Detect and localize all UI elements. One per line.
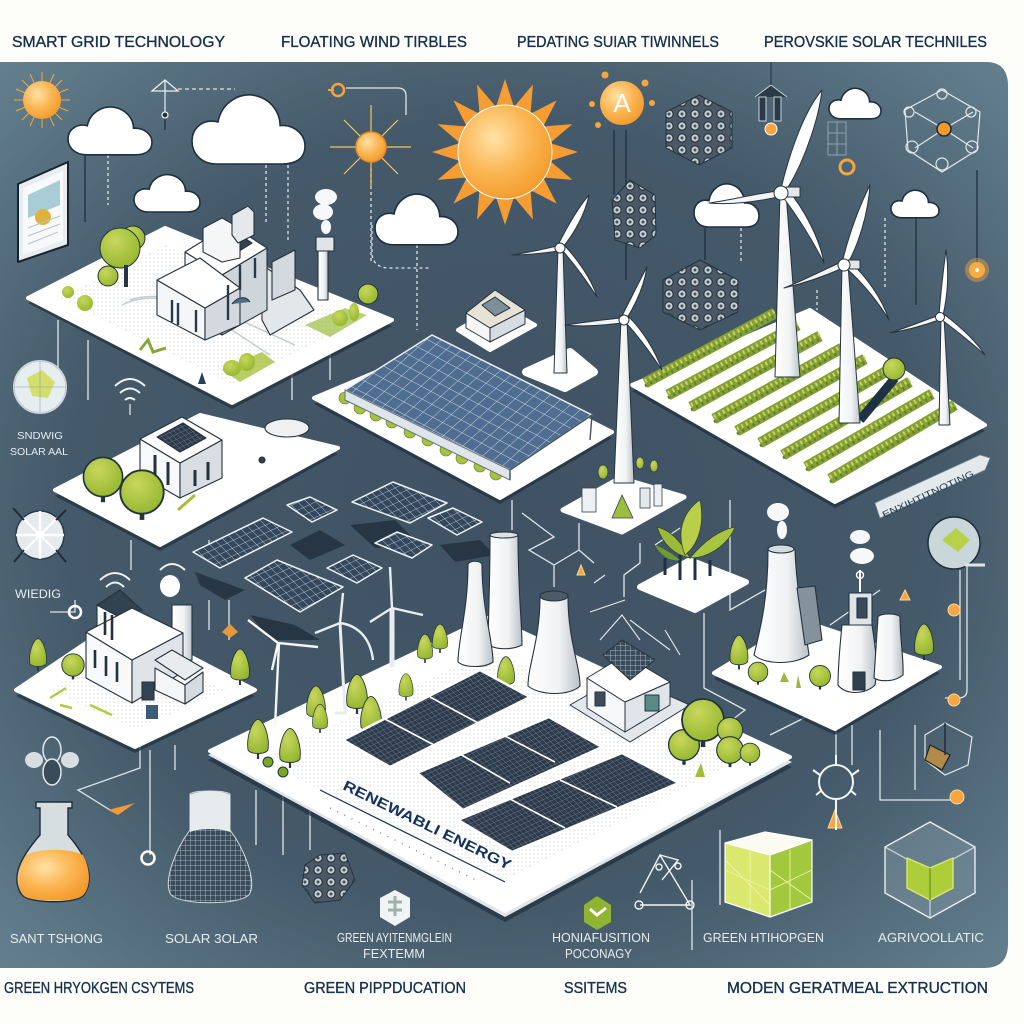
bottom captions in panel: GREEN HTIHOPGEN: [703, 931, 824, 945]
label: sndwig: [10, 431, 68, 458]
bottom headings: GREEN PIPPDUCATION: [304, 980, 466, 997]
wind turbine 4: [512, 195, 597, 373]
cloud 3: [134, 175, 200, 212]
icon: hex network: [904, 89, 980, 172]
smoke puffs right: [767, 503, 874, 564]
wind turbine 5: [565, 267, 662, 483]
platform: big renewable energy base: [208, 617, 792, 922]
solar array: [339, 335, 592, 480]
platform: small house base top: [458, 305, 535, 350]
icon: small glowing sun: [330, 105, 411, 188]
icon: orange flask: [17, 802, 89, 902]
platform: smart grid building base: [28, 228, 392, 409]
icon: pylon top: [152, 80, 178, 118]
icon: green cube: [725, 832, 812, 917]
banner label: [875, 455, 990, 520]
trees on power plant platform: [730, 624, 933, 690]
utility yard: [582, 457, 662, 518]
cloud 1: [68, 107, 152, 155]
icon: ant-like node: [25, 737, 79, 785]
icon: fan globe: [13, 508, 66, 562]
icon: plant sprout: [655, 500, 735, 580]
bottom captions in panel: HONIAFUSITION: [552, 931, 650, 945]
connector lines: [50, 88, 977, 950]
renewable energy title: [320, 778, 514, 882]
panel dividers: [385, 697, 617, 828]
building: smart grid headquarters: [122, 206, 334, 355]
icon: gear node: [813, 755, 859, 830]
platform: small house base: [55, 415, 338, 551]
trees on house platform: [83, 457, 195, 520]
small turbines on platform: [248, 567, 423, 727]
smoke puffs: [313, 189, 337, 234]
panel shadows: [195, 520, 495, 640]
icon: orange A circle: [589, 72, 655, 128]
icon: glass cube: [885, 822, 975, 918]
trees on big platform: [30, 624, 514, 777]
icon: tablet: [18, 162, 68, 262]
icon: large sun: [432, 79, 578, 225]
icon: pylon house: [755, 62, 787, 135]
icon: hex crystal cluster 3: [663, 260, 738, 330]
bottom headings: [4, 980, 988, 997]
bottom captions in panel: [10, 931, 984, 961]
lab building on big platform: [570, 600, 690, 742]
icon: ring node bottom: [142, 852, 154, 864]
house on small platform: [140, 417, 309, 498]
icon: green check badge: [584, 896, 611, 930]
icon: hex house: [380, 890, 410, 926]
icon: hex crystal cluster 1: [666, 95, 732, 165]
wind turbine 1: [709, 90, 824, 377]
top headings: PEROVSKIE SOLAR TECHNILES: [764, 34, 987, 51]
trees on big platform right: [669, 699, 760, 777]
platform: plant base: [640, 560, 746, 610]
bottom captions in panel: AGRIVOOLLATIC: [878, 931, 984, 945]
top headings: PEDATING SUIAR TIWINNELS: [517, 34, 719, 51]
cloud 6: [829, 88, 881, 119]
bottom captions in panel: SANT TSHONG: [10, 932, 103, 946]
crop row texture: [645, 311, 955, 477]
platform: small utility base: [563, 478, 684, 532]
trees on factory platform: [50, 649, 249, 719]
icon: orange marker: [222, 624, 238, 638]
bottom headings: SSITEMS: [564, 980, 627, 997]
crop rows field: [645, 313, 955, 479]
cloud 4: [375, 194, 458, 245]
platform: small turbine base: [526, 352, 594, 388]
tree and shadow in field: [860, 358, 905, 420]
icon: grid panel: [828, 122, 846, 155]
renewable energy title: RENEWABLI ENERGY: [340, 778, 514, 874]
bottom captions in panel: POCONAGY: [565, 947, 633, 961]
icon: wifi signal: [115, 379, 145, 415]
wind turbine 3: [890, 250, 985, 425]
bottom headings: MODEN GERATMEAL EXTRUCTION: [727, 980, 988, 997]
trees on smart grid platform: [62, 226, 378, 384]
icon: sun top left: [14, 72, 70, 128]
icon: connector node orange: [328, 84, 344, 96]
top headings: SMART GRID TECHNOLOGY: [12, 34, 225, 51]
bottom captions in panel: FEXTEMM: [363, 947, 425, 961]
icon: hex crystal cluster 2: [612, 180, 656, 248]
icon: glowing orange dot: [965, 258, 989, 282]
factory on left platform: [86, 590, 203, 704]
smoke and wifi near factory: [100, 564, 185, 597]
platform: power plant base: [714, 620, 940, 735]
platform: factory base: [16, 620, 255, 753]
label: sndwig: SNDWIG: [17, 431, 63, 442]
cloud 2: [192, 95, 305, 164]
label: wiedig: WIEDIG: [15, 587, 61, 601]
cloud 7: [891, 190, 939, 218]
bottom captions in panel: SOLAR 3OLAR: [165, 932, 258, 946]
small house: [466, 290, 525, 342]
cloud 5: [694, 184, 759, 227]
wind turbine 2: [784, 185, 889, 423]
power plant: [754, 545, 903, 692]
icon: compass globe left: [14, 361, 66, 413]
cooling towers on big platform: [458, 532, 580, 694]
banner label: ENXIHTITNOTING: [881, 468, 975, 520]
floating solar panels: [193, 482, 482, 612]
icon: mesh flask: [168, 791, 252, 903]
icon: globe with leaf right: [928, 517, 985, 569]
icon: ring node left: [69, 606, 81, 618]
icon: orange ring: [840, 160, 854, 174]
top headings: FLOATING WIND TIRBLES: [281, 34, 467, 51]
platform: solar array base: [314, 345, 612, 504]
orange indicator nodes right: [577, 565, 964, 828]
icon: orange A circle: A: [613, 88, 631, 118]
bottom headings: GREEN HRYOKGEN CSYTEMS: [4, 980, 194, 997]
icon: rock cluster: [302, 853, 355, 903]
platform: agrivoltaic field base: [632, 310, 985, 508]
bottom captions in panel: GREEN AYITENMGLEIN: [337, 931, 452, 945]
icon: orange arrow: [108, 803, 135, 815]
label: sndwig: SOLAR AAL: [10, 447, 68, 458]
top headings: [12, 34, 987, 51]
solar panels on big platform: [343, 670, 679, 852]
icon: molecule network: [635, 855, 694, 909]
crop row shadow texture: [645, 316, 955, 482]
icon: small molecule machine: [925, 723, 972, 775]
